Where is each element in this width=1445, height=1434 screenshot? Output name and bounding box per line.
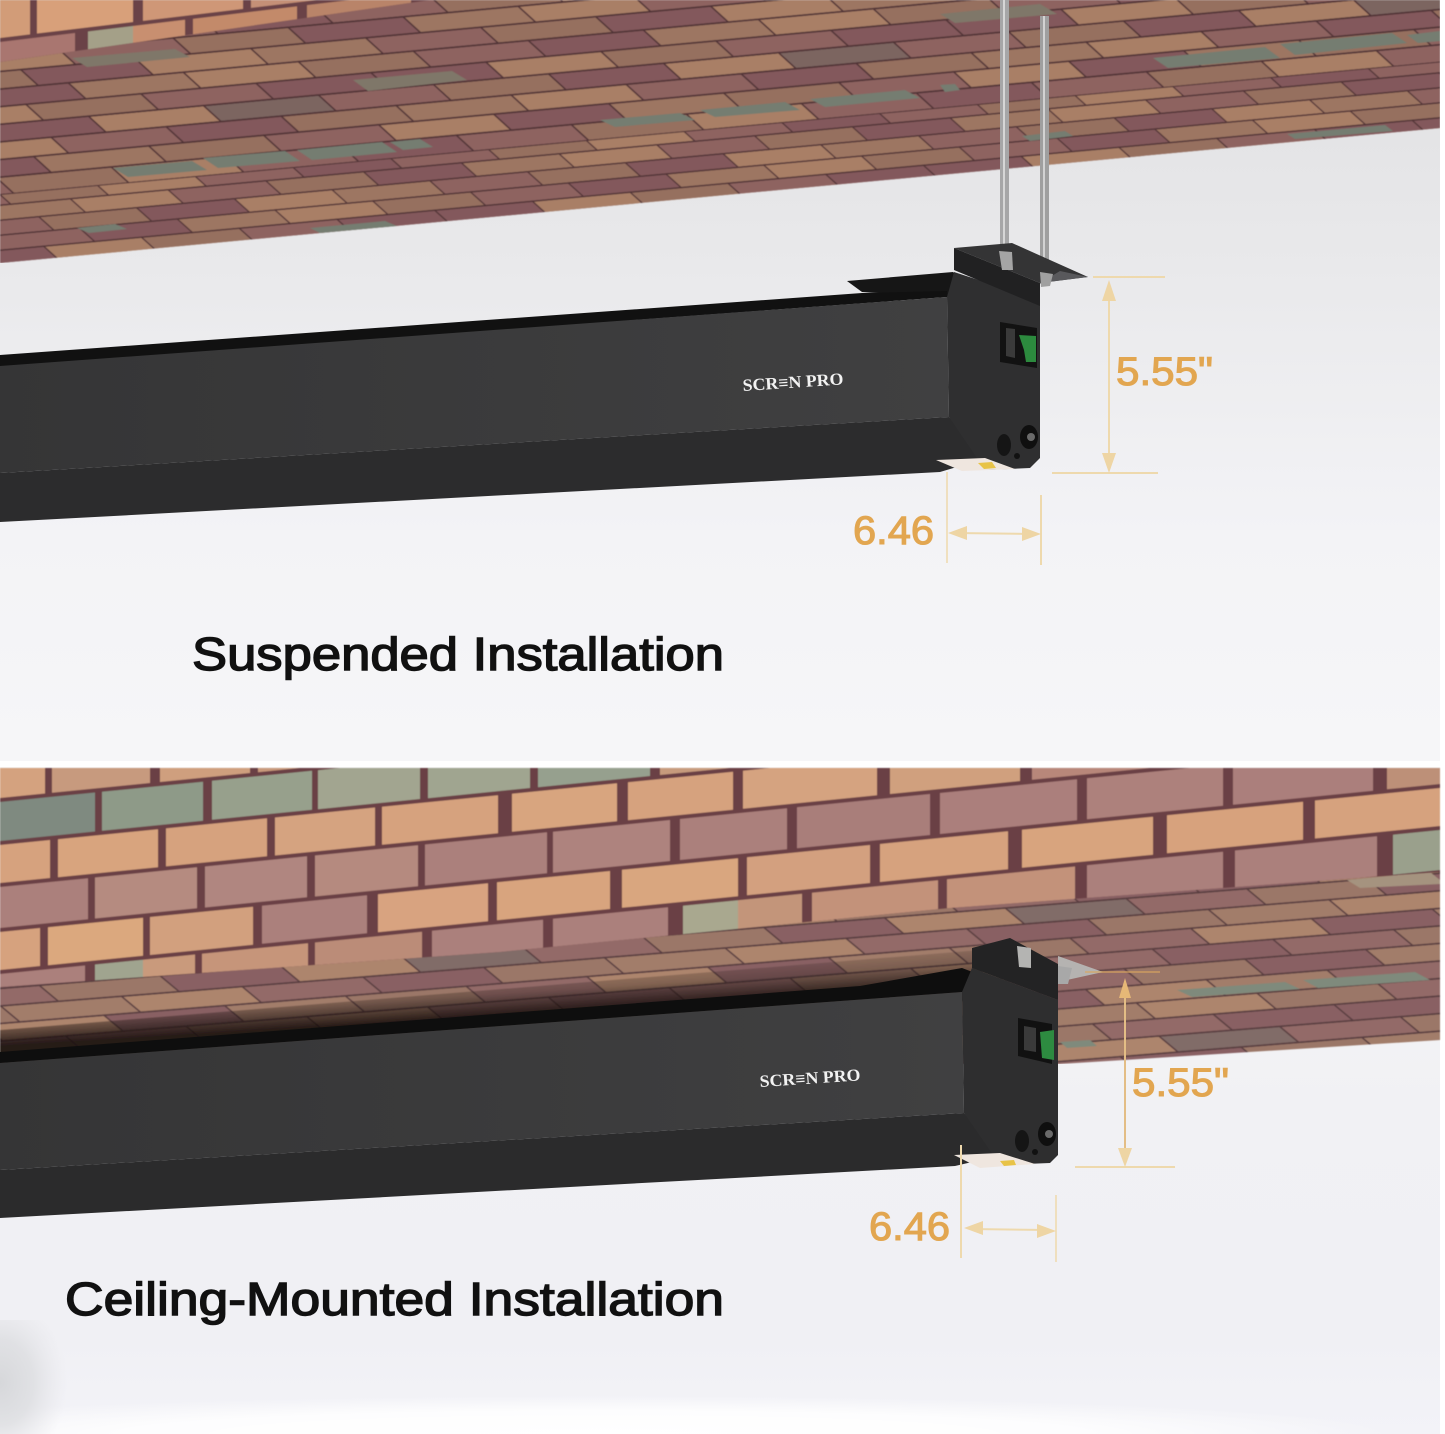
steel threaded rods <box>1000 0 1049 284</box>
bottom light glow <box>0 1364 1440 1434</box>
mounting bracket <box>954 243 1088 283</box>
warning label <box>954 1153 1035 1168</box>
logo: SCR≡N PRO <box>742 369 844 395</box>
power switch <box>1000 322 1037 368</box>
logo: SCR≡N PRO <box>759 1065 861 1091</box>
bottom left shadow <box>0 1320 90 1434</box>
screen housing <box>0 938 1103 1218</box>
dimension: height 5.55 inches: 5.55" <box>1116 350 1213 394</box>
connectors <box>997 425 1038 459</box>
dimension: height 5.55 inches: 5.55" <box>1132 1061 1229 1105</box>
warning label <box>936 458 1015 471</box>
dimension: depth 6.46 <box>853 472 1041 565</box>
dimension: depth 6.46: 6.46 <box>869 1205 950 1249</box>
panel: ceiling-mounted installation <box>0 767 1441 1434</box>
dimension: height 5.55 inches <box>1052 277 1213 473</box>
brick wall and ceiling, ceiling-mounted panel <box>0 767 1441 1064</box>
screen housing <box>0 243 1088 522</box>
wall brick courses <box>0 767 1441 988</box>
mounting bracket <box>972 938 1058 1000</box>
connectors <box>1015 1122 1056 1155</box>
power switch <box>1018 1018 1054 1064</box>
heading: ceiling-mounted installation: Ceiling-Mounted Installation <box>65 1273 724 1325</box>
dimension: depth 6.46: 6.46 <box>853 509 934 553</box>
dimension: depth 6.46 <box>869 1145 1056 1262</box>
dimension: height 5.55 inches <box>1075 972 1229 1167</box>
brick ceiling, suspended panel <box>0 0 1440 263</box>
panel: suspended installation <box>0 0 1440 761</box>
heading: suspended installation: Suspended Installation <box>192 628 724 680</box>
